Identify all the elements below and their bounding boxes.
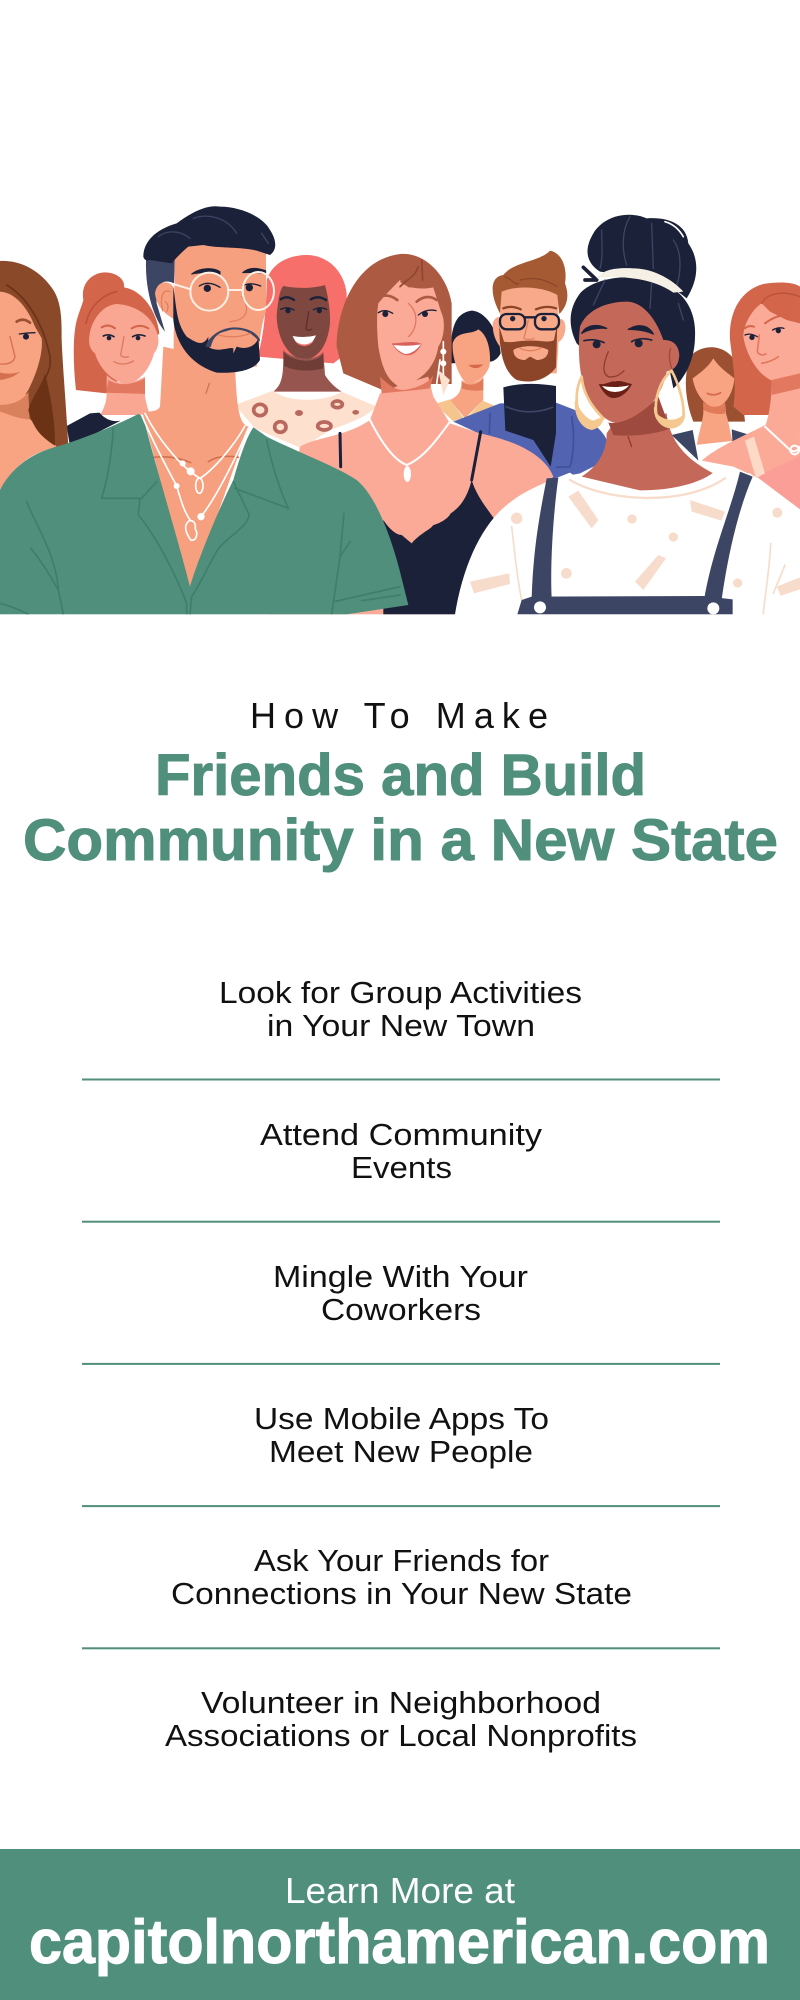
list item 3 <box>273 1259 528 1327</box>
list item 4: Use Mobile Apps To <box>254 1401 549 1436</box>
list item 6: Associations or Local Nonprofits <box>165 1718 637 1753</box>
list item 4: Meet New People <box>269 1434 533 1469</box>
list item 6 <box>165 1685 637 1753</box>
illustration: crowd of people <box>0 206 800 614</box>
person: center woman with fringe and black dress <box>267 254 553 614</box>
heading: friends and build community: Community in a New State <box>23 808 778 873</box>
list item 1 <box>219 975 582 1043</box>
list item 2 <box>260 1117 543 1185</box>
footer: website url: capitolnorthamerican.com <box>29 1908 770 1977</box>
list item 5 <box>171 1543 632 1611</box>
person: right woman with long red hair <box>702 282 800 509</box>
person: back figure with black hair <box>435 311 501 421</box>
necklaces <box>142 413 248 540</box>
list item 4 <box>254 1401 549 1469</box>
list item 1: in Your New Town <box>267 1008 535 1043</box>
heading: how to make: How To Make <box>250 695 548 736</box>
person: main man in green shirt <box>0 206 408 614</box>
list item 3: Mingle With Your <box>273 1259 528 1294</box>
person: bearded man in turtleneck and blue jacket <box>453 251 607 478</box>
earrings <box>575 371 685 430</box>
person: woman with pink bob <box>235 255 377 448</box>
list item 2: Attend Community <box>260 1117 543 1152</box>
person: left woman with long brown hair <box>0 261 68 490</box>
list item 5: Ask Your Friends for <box>254 1543 549 1578</box>
person: front woman with bun and overalls <box>455 215 800 614</box>
list item 5: Connections in Your New State <box>171 1576 632 1611</box>
heading: friends and build community: Friends and Build <box>155 743 646 808</box>
heading: friends and build community <box>23 743 778 873</box>
footer banner <box>0 1849 800 2000</box>
list item 3: Coworkers <box>321 1292 481 1327</box>
footer: learn more text: Learn More at <box>285 1870 515 1911</box>
list item 2: Events <box>351 1150 452 1185</box>
shirt <box>0 414 408 614</box>
list item 6: Volunteer in Neighborhood <box>201 1685 601 1720</box>
list item 1: Look for Group Activities <box>219 975 582 1010</box>
person: back woman with brown hair <box>672 347 750 463</box>
person: redhead woman with bun <box>67 272 159 447</box>
